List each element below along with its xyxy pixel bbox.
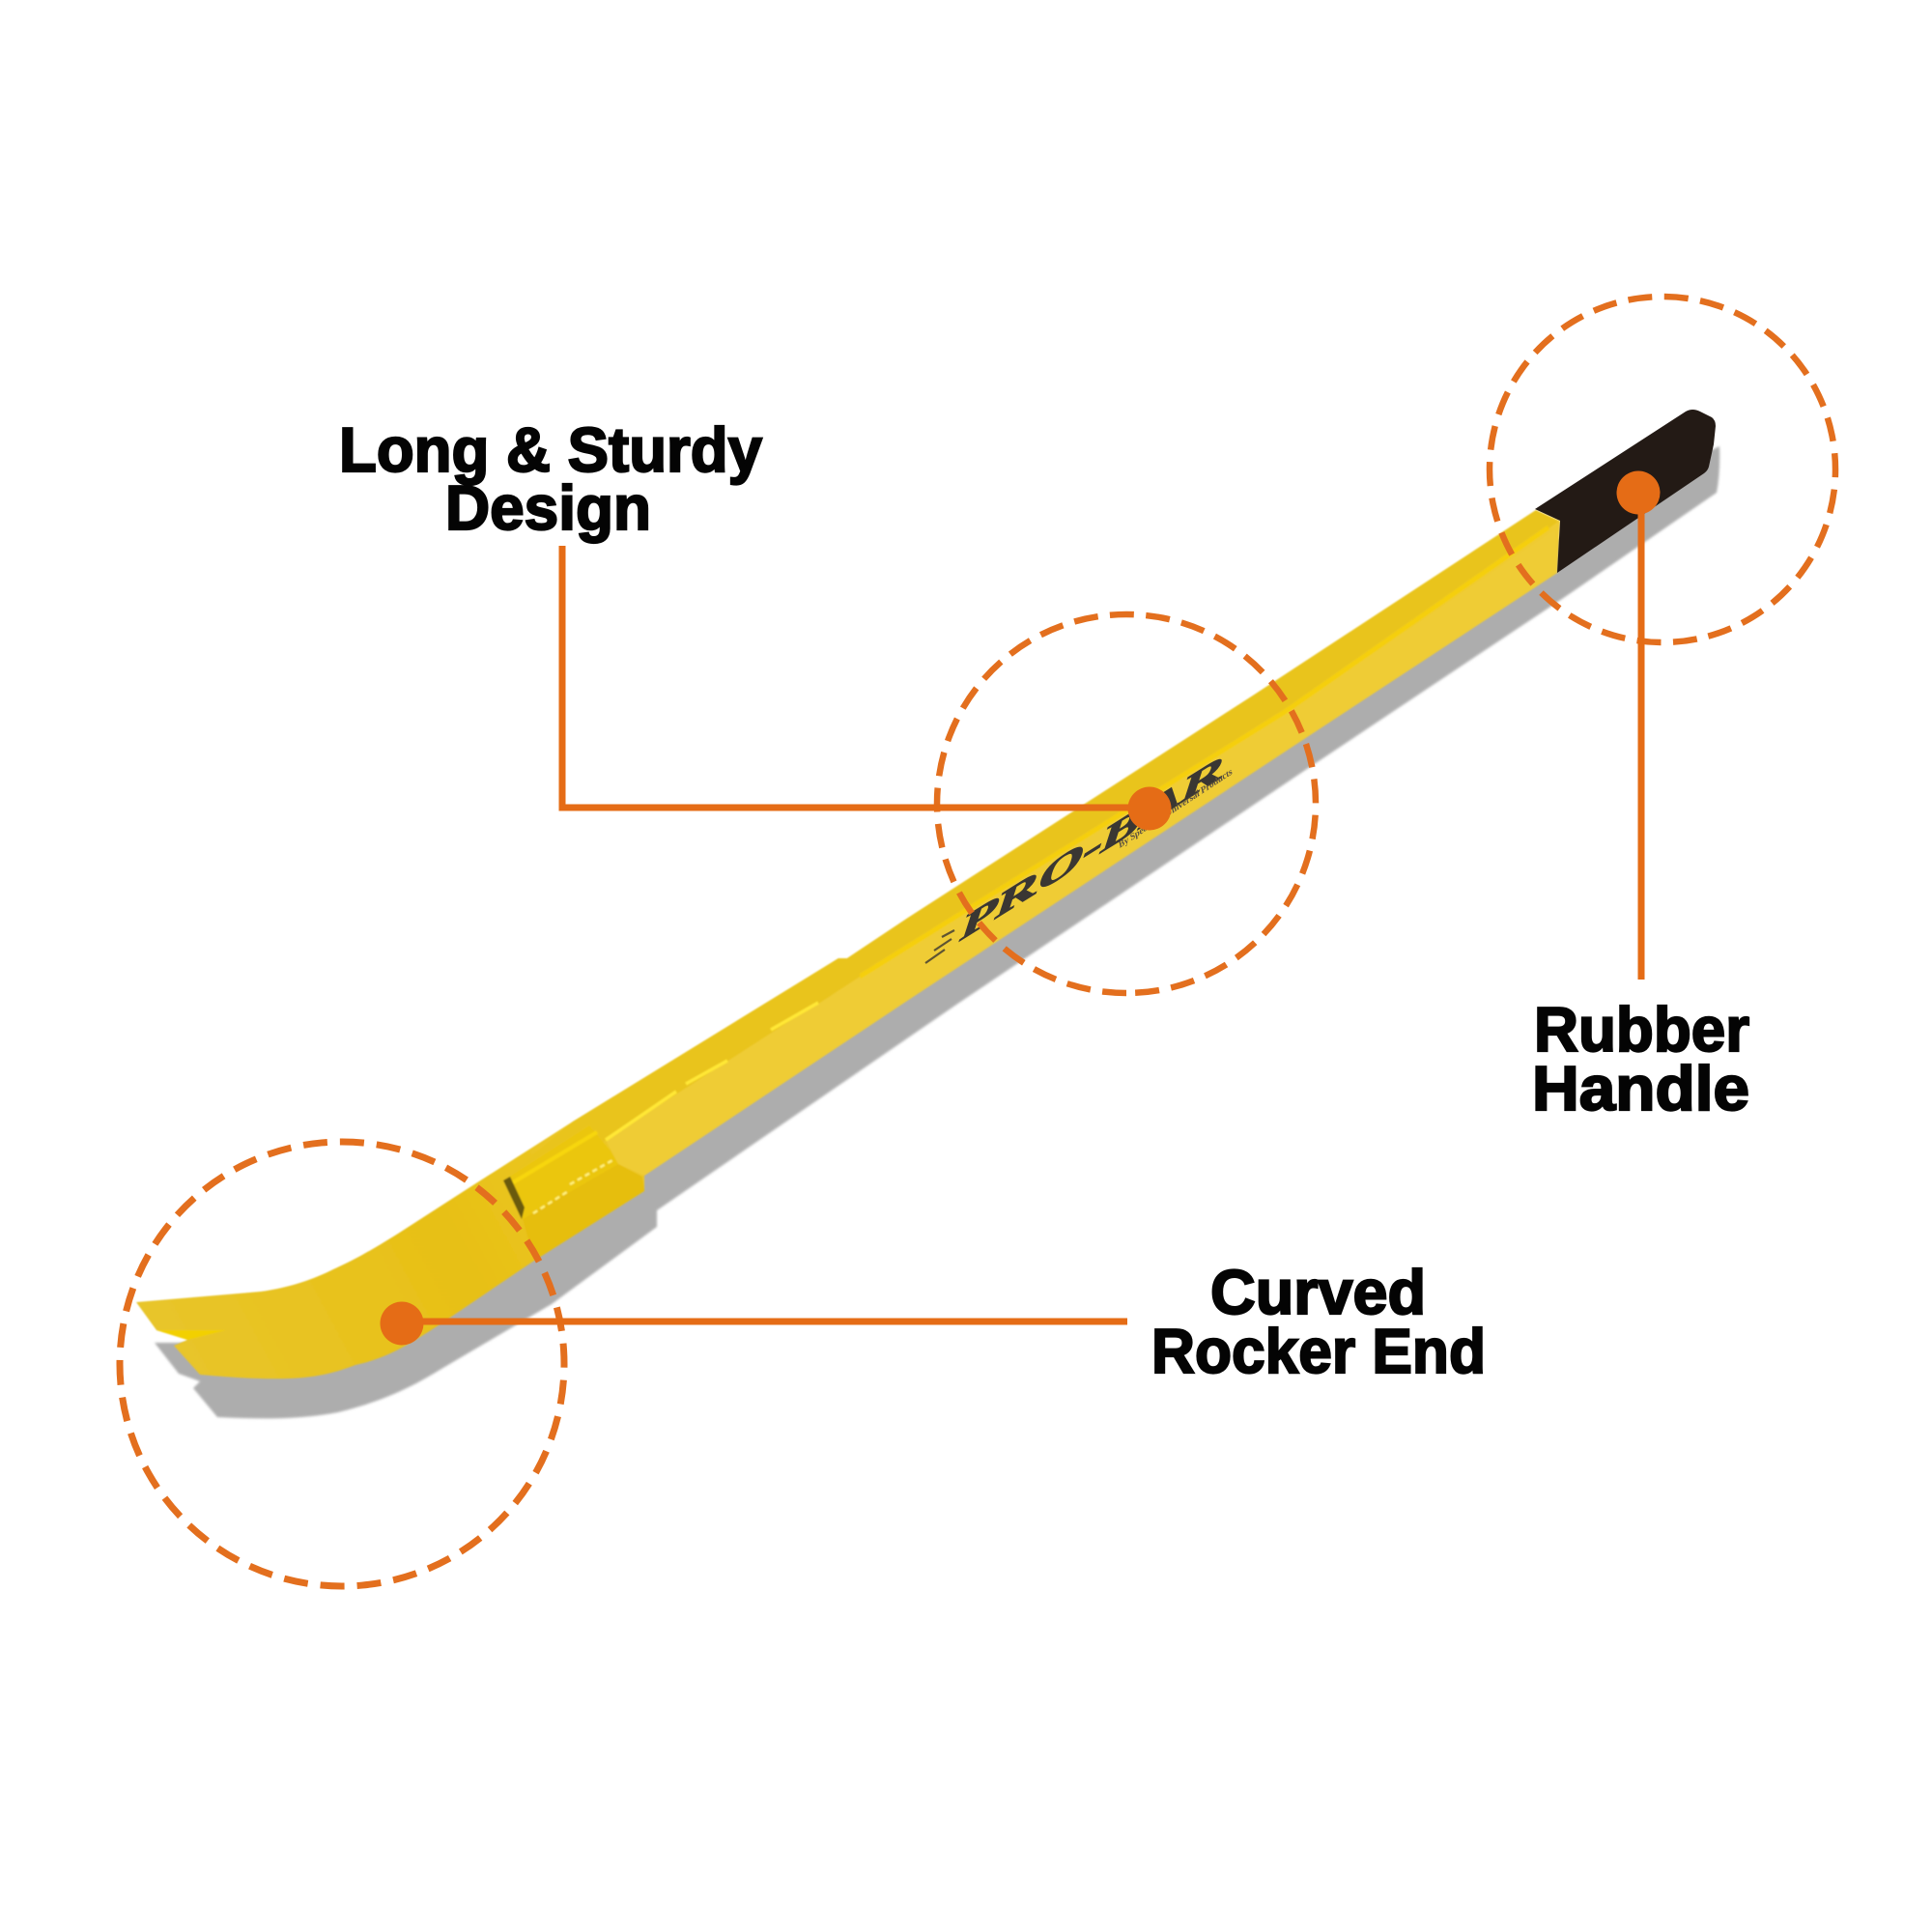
pry bar [136,510,1560,1378]
tube glints [533,1159,614,1213]
leader: curved rocker end [381,1302,1127,1345]
tube upper ridge [510,1132,597,1184]
leader: long and sturdy design [562,546,1171,831]
dashed circle: rocker end [100,1122,583,1605]
claw notch [156,1330,226,1340]
dashed circle: shaft [937,614,1316,993]
dashed circle: handle [1459,266,1866,673]
bar body [136,510,1560,1378]
label: rubber handle: Handle [1532,1053,1749,1123]
label: long and sturdy design: Long & Sturdy [339,414,762,485]
label: curved rocker end [1151,1257,1486,1386]
upper collar [773,958,860,1005]
label: curved rocker end: Curved [1210,1257,1426,1327]
lower face of shaft [606,529,1557,1176]
label: rubber handle [1532,994,1749,1123]
bar logo [925,742,1234,963]
pry bar drop shadow [155,446,1719,1418]
upper face of shaft [503,510,1558,1198]
logo wordmark: PRO-BAR [955,742,1233,951]
rubber handle [1535,410,1716,573]
logo tagline: By Spectrum Universal Products [1118,767,1234,851]
label: curved rocker end: Rocker End [1151,1316,1486,1386]
label: rubber handle: Rubber [1534,994,1749,1065]
label: long and sturdy design: Design [445,472,651,543]
bracket tube opening [503,1177,525,1219]
crease highlight [860,527,1548,977]
bracket tube [503,1125,618,1219]
label: long and sturdy design [339,414,762,543]
logo speed lines [925,930,954,963]
tube bracket flap [523,1150,644,1261]
weld highlights [606,1003,818,1140]
leader: rubber handle [1617,471,1660,980]
